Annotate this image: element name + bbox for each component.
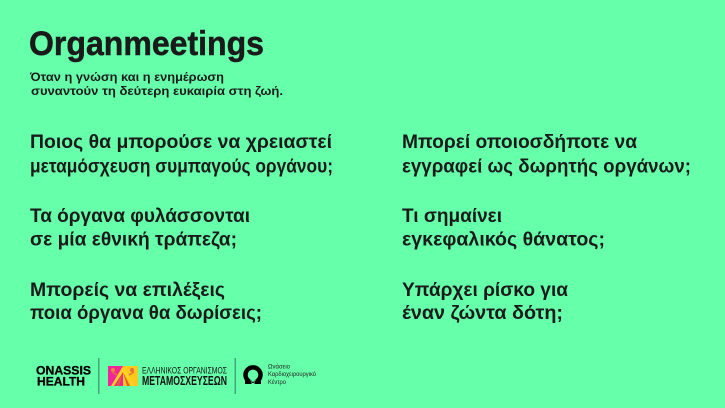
question: national bank <box>30 205 250 250</box>
question: national bank: σε μία εθνική τράπεζα; <box>30 228 237 250</box>
subtitle: συναντούν τη δεύτερη ευκαιρία στη ζωή. <box>31 84 283 98</box>
question: transplant need: Ποιος θα μπορούσε να χρειαστεί <box>30 131 332 153</box>
question: choosing organs: ποια όργανα θα δωρίσεις; <box>30 302 262 324</box>
logo: Hellenic Transplant Organization <box>108 366 227 388</box>
icon: transplant emblem <box>108 366 138 386</box>
question: choosing organs: Μπορείς να επιλέξεις <box>30 279 225 301</box>
question: national bank: Τα όργανα φυλάσσονται <box>30 205 250 227</box>
logo: Hellenic Transplant Organization: ΕΛΛΗΝΙΚΟΣ ΟΡΓΑΝΙΣΜΟΣ <box>142 366 227 376</box>
logo: Onassis Health: ONASSIS <box>36 366 91 378</box>
icon: omega emblem <box>245 367 261 384</box>
question: choosing organs <box>30 279 262 324</box>
logo: Onassis Cardiac Surgery Centre <box>245 362 316 386</box>
question: living donor risk: Υπάρχει ρίσκο για <box>402 279 568 301</box>
question: who can register: εγγραφεί ως δωρητής οργάνων; <box>402 156 691 178</box>
logo: Onassis Health: HEALTH <box>37 376 85 388</box>
question: who can register: Μπορεί οποιοσδήποτε να <box>402 131 637 153</box>
title: Organmeetings <box>29 25 264 63</box>
logo: Onassis Cardiac Surgery Centre: Κέντρο <box>268 378 286 386</box>
subtitle <box>29 70 283 98</box>
question: brain death: εγκεφαλικός θάνατος; <box>402 228 605 250</box>
question: brain death: Τι σημαίνει <box>402 205 502 227</box>
logo: Hellenic Transplant Organization: ΜΕΤΑΜΟΣΧΕΥΣΕΩΝ <box>142 373 227 388</box>
question: living donor risk <box>402 279 568 324</box>
logo: Onassis Cardiac Surgery Centre: Ωνάσειο <box>268 362 290 370</box>
logo: Onassis Cardiac Surgery Centre: Καρδιοχειρουργικό <box>268 370 316 378</box>
question: transplant need <box>30 131 333 178</box>
subtitle: Όταν η γνώση και η ενημέρωση <box>29 70 224 84</box>
question: brain death <box>402 205 605 250</box>
question: transplant need: μεταμόσχευση συμπαγούς οργάνου; <box>30 156 333 178</box>
logo: Onassis Health <box>36 366 91 388</box>
question: living donor risk: έναν ζώντα δότη; <box>402 302 563 324</box>
question: who can register <box>402 131 691 178</box>
